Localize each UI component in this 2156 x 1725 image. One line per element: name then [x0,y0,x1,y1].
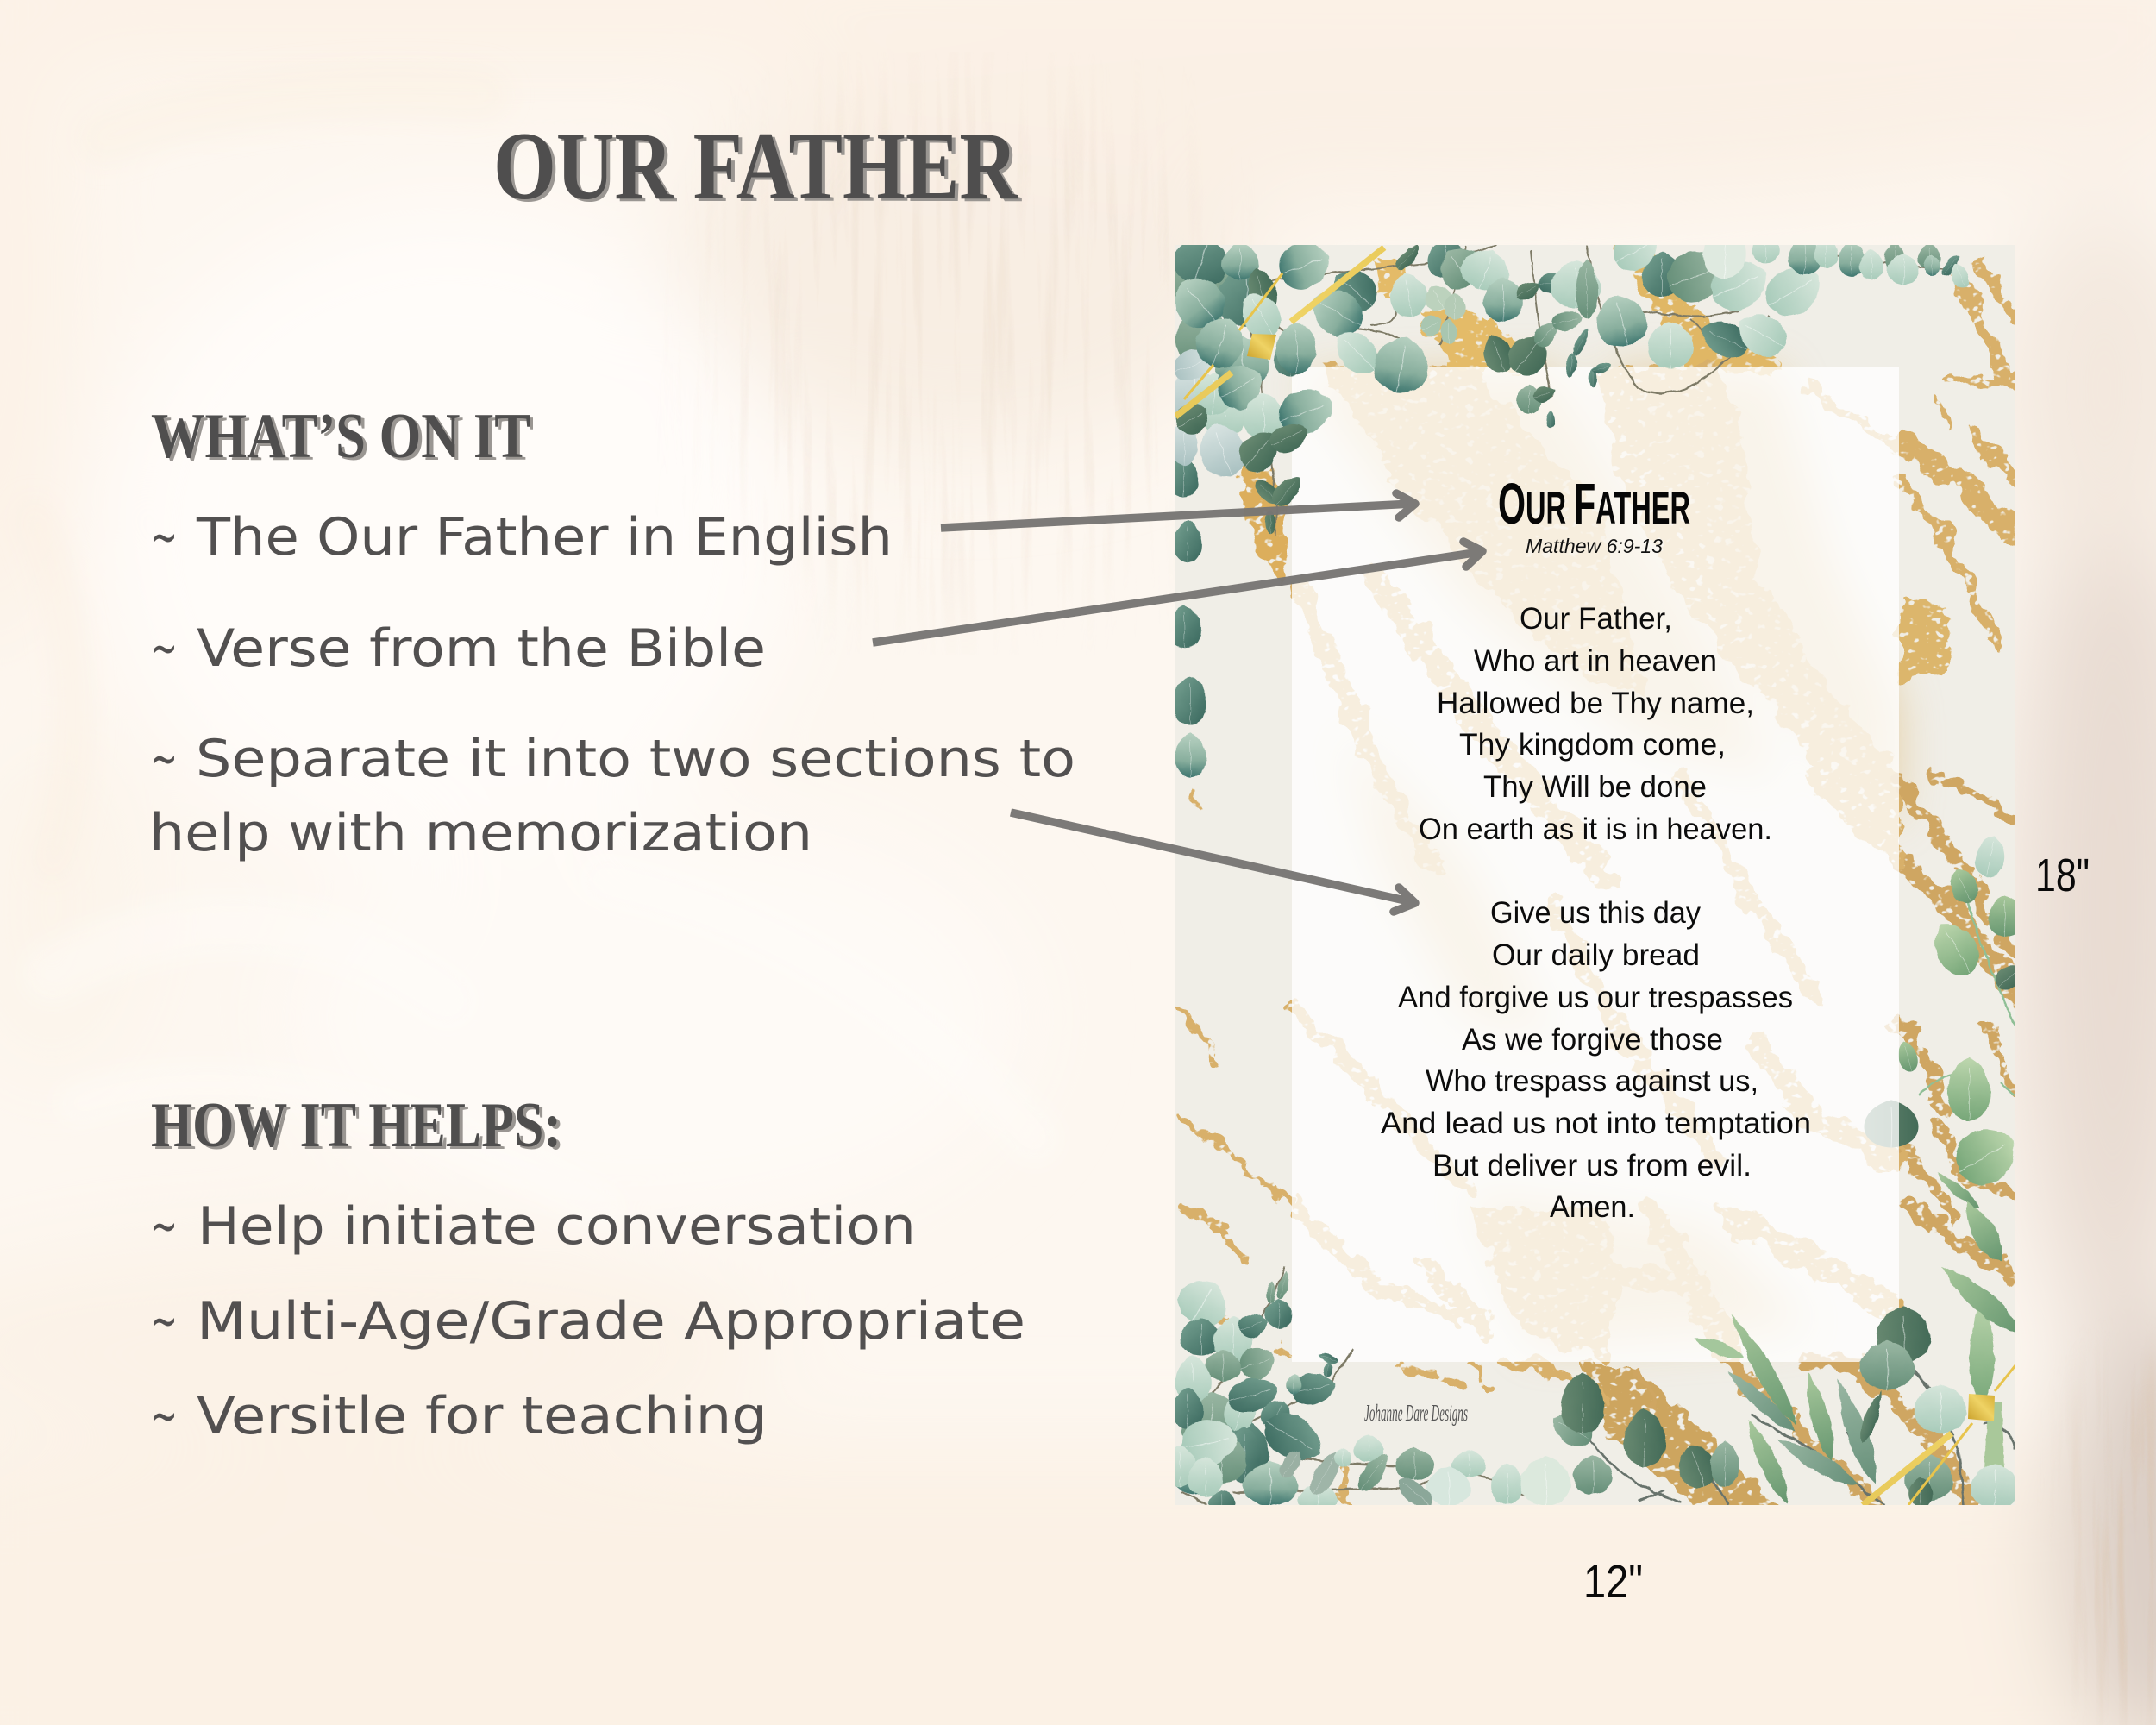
text: the Our Father in English: The Our Father in English [196,507,893,568]
poster prayer text: first section: Thy kingdom come, [1459,728,1726,762]
text: versitle for teaching: Versitle for teaching [197,1386,768,1446]
poster: marble base [1175,245,2015,1505]
text: the Our Father in English: ~ [150,507,178,568]
poster: green leaves right side [1919,833,2028,1213]
arrow: to second prayer section [1011,812,1415,912]
poster: Our Father print [1163,222,2028,1513]
poster: gold bars and squares [1175,248,2015,1505]
poster prayer text: second section: Our daily bread [1492,938,1700,972]
arrow: to verse reference [873,542,1482,643]
poster prayer text: second section: And lead us not into temptation [1381,1107,1811,1140]
list: what's on it [149,507,1075,863]
poster prayer text: first section: Hallowed be Thy name, [1437,687,1754,720]
dimension label: width: 12" [1583,1556,1643,1608]
poster prayer text: second section [1381,896,1811,1224]
text: versitle for teaching: ~ [150,1386,178,1446]
poster prayer text: first section: Who art in heaven [1474,644,1717,678]
heading: what's on it: WHAT’S ON IT [151,401,530,472]
poster: eucalyptus cluster bottom left [1163,1268,1570,1513]
arrow: to poster title [941,493,1415,528]
poster: eucalyptus garland top [1163,222,1972,777]
poster prayer text: second section: Give us this day [1490,896,1701,930]
text: help initiate conversation: Help initiate conversation [197,1196,916,1257]
poster: gold marble veins [1179,248,2015,1509]
poster prayer text: second section: Who trespass against us, [1426,1064,1758,1098]
poster: sage foliage bottom right [1545,1195,2028,1509]
poster prayer text: second section: Amen. [1550,1190,1635,1224]
list: how it helps [150,1196,1025,1446]
poster: inner translucent panel [1292,367,1899,1362]
poster prayer text: first section: On earth as it is in heaven. [1419,812,1772,846]
text: multi-age appropriate: Multi-Age/Grade Appropriate [197,1291,1025,1352]
poster: leaves beneath the panel [1864,1039,1921,1148]
text: separate into two sections: Separate it into two sections to [196,729,1075,789]
poster title: OUR FATHER [1498,472,1690,536]
poster prayer text: second section: But deliver us from evil. [1432,1149,1752,1182]
poster prayer text: second section: As we forgive those [1462,1023,1723,1057]
poster prayer text: first section: Thy Will be done [1483,770,1707,804]
text: multi-age appropriate: ~ [150,1291,178,1352]
text: separate into two sections: ~ [150,729,178,789]
poster prayer text: first section [1419,602,1772,846]
text: separate into two sections: help with memorization [149,803,812,863]
poster prayer text: second section: And forgive us our trespasses [1398,981,1793,1014]
poster prayer text: first section: Our Father, [1520,602,1672,636]
text: verse from the Bible: Verse from the Bible [197,618,766,679]
dimension label: height: 18" [2035,850,2090,901]
text: verse from the Bible: ~ [150,618,178,679]
poster: Our Father print: Johanne Dare Designs [1364,1400,1468,1426]
poster verse reference: Matthew 6:9-13 [1526,535,1663,557]
heading: how it helps: HOW IT HELPS: [151,1090,561,1161]
text: help initiate conversation: ~ [150,1196,178,1257]
poster: soft gold wash [1302,371,1897,1346]
text: separate into two sections [149,729,1075,863]
title: OUR FATHER [493,113,1018,220]
